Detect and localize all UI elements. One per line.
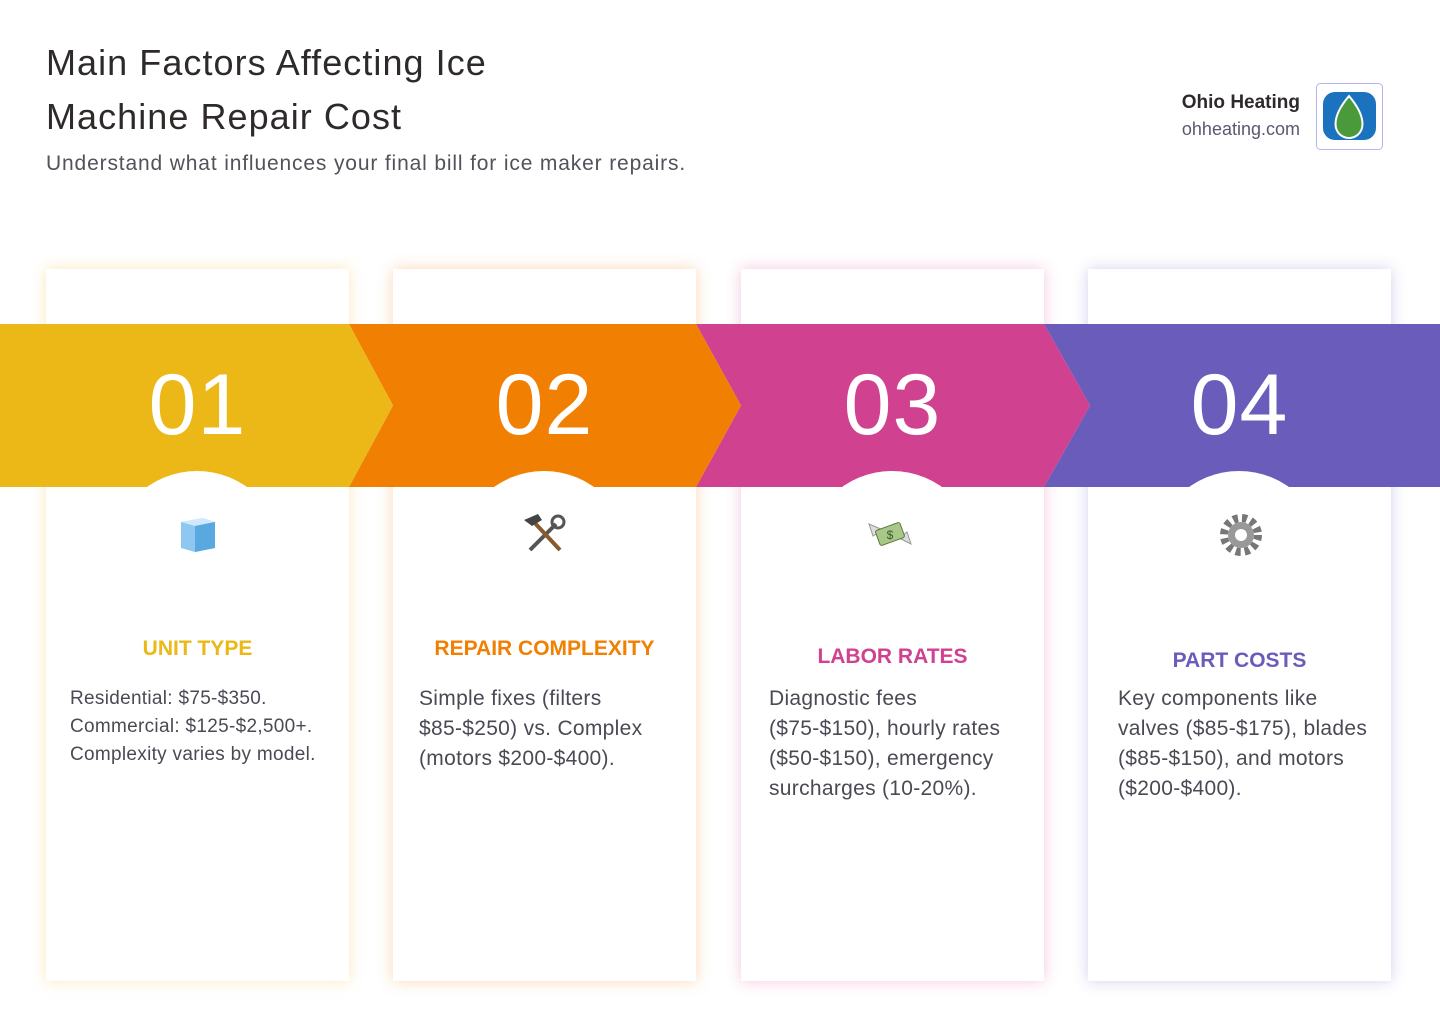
- card 1 text: Complexity varies by model.: [70, 744, 316, 765]
- icon: gear: [1220, 514, 1262, 556]
- card 4 text: ($85-$150), and motors: [1118, 747, 1344, 770]
- brand name: Ohio Heating: [1182, 92, 1300, 113]
- icon: leaf logo: [1316, 83, 1383, 150]
- card 4 title: PART COSTS: [1173, 649, 1306, 672]
- icon: money wings: $: [887, 528, 894, 542]
- brand url: ohheating.com: [1182, 119, 1300, 139]
- card 3 text: [769, 687, 1000, 800]
- circle bumps: [147, 471, 1289, 487]
- card 3 text: ($75-$150), hourly rates: [769, 717, 1000, 740]
- chevron band: [0, 324, 1440, 487]
- text: 04: [1191, 357, 1288, 453]
- card 1 text: Residential: $75-$350.: [70, 688, 267, 709]
- card 1 text: [70, 688, 316, 765]
- title: Main Factors Affecting Ice: [46, 42, 487, 83]
- card 3 text: ($50-$150), emergency: [769, 747, 994, 770]
- brand: [1182, 83, 1383, 150]
- card 1 title: UNIT TYPE: [143, 637, 252, 660]
- subtitle: Understand what influences your final bill for ice maker repairs.: [46, 152, 686, 175]
- card 2 text: Simple fixes (filters: [419, 687, 602, 710]
- icon: tools: [524, 514, 566, 552]
- card 2 text: (motors $200-$400).: [419, 747, 615, 770]
- card 4 text: valves ($85-$175), blades: [1118, 717, 1367, 740]
- card 2 text: $85-$250) vs. Complex: [419, 717, 642, 740]
- card 3 title: LABOR RATES: [817, 645, 968, 668]
- text: 02: [496, 357, 593, 453]
- text: 03: [844, 357, 941, 453]
- card 3 text: Diagnostic fees: [769, 687, 917, 710]
- card 1 text: Commercial: $125-$2,500+.: [70, 716, 312, 737]
- icon: money wings: [868, 522, 912, 546]
- icon: ice cube: [181, 518, 215, 552]
- card 2 title: REPAIR COMPLEXITY: [434, 637, 655, 660]
- cards: [46, 269, 349, 981]
- card 4 text: Key components like: [1118, 687, 1317, 710]
- title: Machine Repair Cost: [46, 96, 402, 137]
- card 3 text: surcharges (10-20%).: [769, 777, 977, 800]
- title: [46, 42, 487, 137]
- card 4 text: ($200-$400).: [1118, 777, 1242, 800]
- numbers: 01: [149, 357, 246, 453]
- card 4 text: [1118, 687, 1367, 800]
- card 2 text: [419, 687, 642, 770]
